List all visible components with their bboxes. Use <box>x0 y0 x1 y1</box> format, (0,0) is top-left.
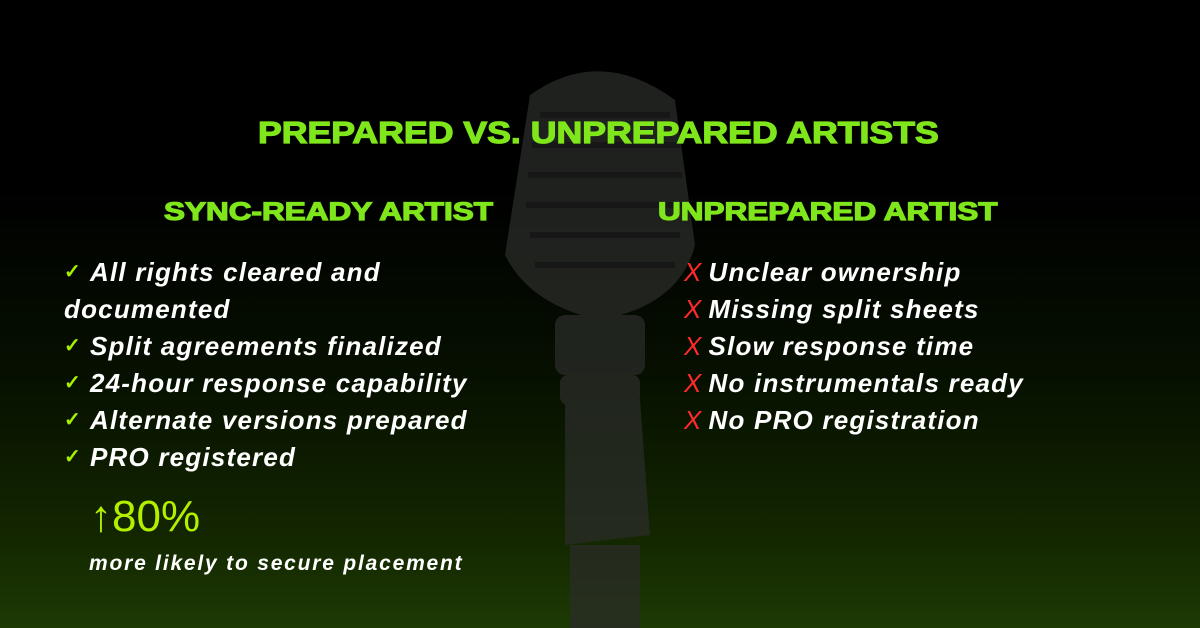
stat caption: more likely to secure placement <box>89 552 463 575</box>
list: unprepared: XNo PRO registration <box>684 405 980 435</box>
list: sync-ready: ✓ All rights cleared and <box>64 257 381 287</box>
list: unprepared: XSlow response time <box>684 331 974 361</box>
stat: 80%: ↑80% <box>90 492 200 541</box>
list: sync-ready <box>64 257 468 472</box>
list: sync-ready: ✓ PRO registered <box>64 442 296 472</box>
list: sync-ready: documented <box>64 294 231 324</box>
heading: unprepared artist: UNPREPARED ARTIST <box>658 198 998 226</box>
list: sync-ready: ✓ Alternate versions prepared <box>64 405 468 435</box>
heading: sync-ready artist: SYNC-READY ARTIST <box>164 198 493 226</box>
list: unprepared <box>684 257 1024 435</box>
title: PREPARED VS. UNPREPARED ARTISTS <box>258 115 939 150</box>
icon: microphone background <box>505 71 695 628</box>
list: unprepared: XUnclear ownership <box>684 257 962 287</box>
list: sync-ready: ✓ Split agreements finalized <box>64 331 442 361</box>
list: sync-ready: ✓ 24-hour response capability <box>64 368 468 398</box>
list: unprepared: XMissing split sheets <box>684 294 980 324</box>
list: unprepared: XNo instrumentals ready <box>684 368 1024 398</box>
